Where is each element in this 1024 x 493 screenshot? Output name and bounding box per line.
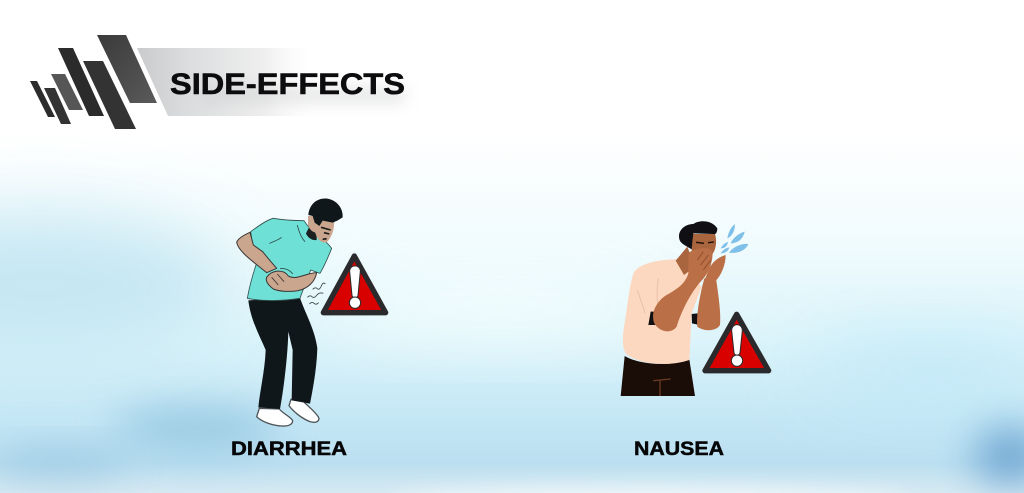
finger lines — [697, 252, 711, 270]
closed eyes — [696, 242, 714, 243]
belt tie line — [653, 379, 671, 396]
left arm — [237, 232, 277, 273]
front arm and hand — [653, 248, 713, 331]
illustration: man with stomach pain — [237, 198, 386, 426]
heading text: SIDE-EFFECTS — [170, 68, 405, 101]
hair — [308, 198, 343, 226]
icon: warning triangle — [323, 256, 386, 313]
facial details — [321, 227, 331, 239]
heading glow — [200, 88, 405, 102]
heading banner — [137, 48, 320, 116]
exclamation mark — [731, 325, 743, 366]
finger lines — [272, 274, 284, 285]
back arm — [697, 278, 720, 330]
illustration: man with nausea — [621, 221, 769, 396]
section heading: side-effects — [30, 35, 405, 129]
trousers — [248, 298, 317, 409]
face — [315, 218, 334, 243]
sleeve shadows — [648, 312, 699, 325]
face — [692, 234, 716, 255]
forearm and hand — [266, 271, 317, 291]
logo: slanted bars — [30, 35, 157, 129]
label: diarrhea: DIARRHEA — [231, 438, 347, 460]
neck and collar — [306, 227, 317, 240]
label: nausea: NAUSEA — [634, 438, 724, 460]
hair — [679, 221, 717, 249]
t-shirt — [623, 259, 702, 364]
t-shirt — [247, 218, 332, 301]
open hand — [704, 255, 726, 281]
shirt creases — [269, 225, 305, 274]
icon: warning triangle — [705, 314, 769, 371]
ear and neck skin — [308, 216, 317, 233]
squiggle lines — [307, 283, 325, 304]
droplets — [721, 224, 748, 253]
shirt creases — [637, 278, 658, 313]
exclamation mark — [349, 266, 361, 308]
shoes — [257, 399, 319, 426]
trousers — [621, 356, 695, 396]
neck — [676, 247, 695, 275]
